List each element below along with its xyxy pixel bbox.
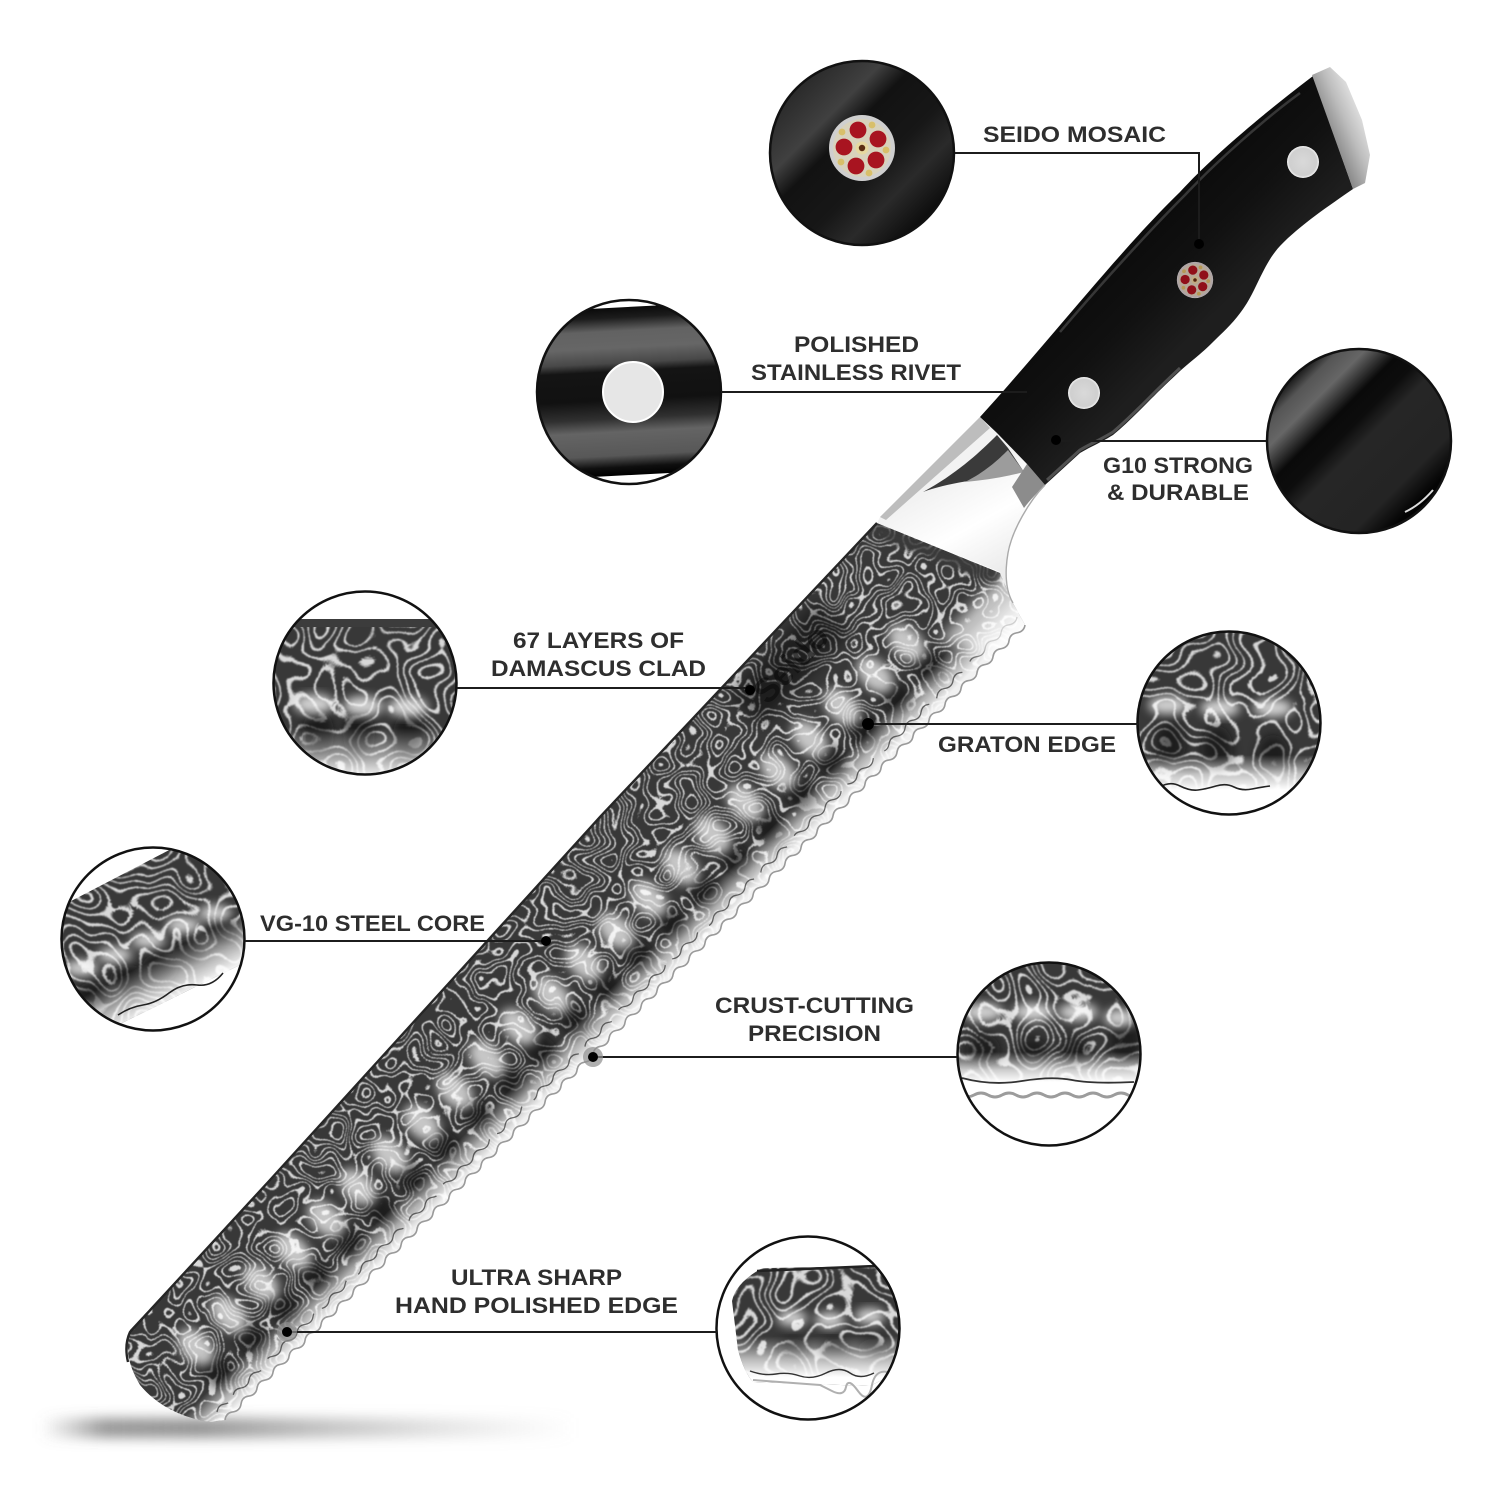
rivet: top bbox=[1287, 146, 1319, 178]
detail circle: rivet bbox=[536, 298, 722, 486]
callout: polished stainless rivet bbox=[496, 299, 1027, 485]
label: HAND POLISHED EDGE bbox=[395, 1293, 678, 1318]
butt cap bbox=[1312, 67, 1370, 189]
detail circle: hollows bbox=[1135, 628, 1325, 825]
leader line bbox=[245, 940, 546, 942]
label: GRATON EDGE bbox=[938, 732, 1116, 757]
logo shadow band bbox=[729, 600, 851, 726]
blade spine bbox=[126, 523, 877, 1362]
label: STAINLESS RIVET bbox=[751, 360, 962, 385]
leader dot bbox=[1194, 239, 1204, 249]
ground shadow bbox=[40, 1418, 575, 1438]
callout: VG-10 steel core bbox=[50, 845, 551, 1035]
handle bbox=[980, 67, 1370, 485]
detail circle: damascus bbox=[270, 592, 460, 784]
label bbox=[751, 332, 962, 385]
granton hollows: highlights bbox=[171, 618, 932, 1372]
serrated edge outline bbox=[225, 625, 1025, 1420]
callout: Seido mosaic bbox=[765, 55, 1204, 250]
detail circle: mosaic bbox=[765, 55, 960, 250]
label bbox=[395, 1265, 678, 1318]
knife illustration bbox=[115, 67, 1370, 1435]
leader line bbox=[955, 153, 1199, 244]
label bbox=[491, 628, 706, 681]
label: PRECISION bbox=[748, 1021, 881, 1046]
blade bbox=[115, 510, 1040, 1435]
detail circle: G10 grain bbox=[1262, 345, 1457, 540]
label: 67 LAYERS OF bbox=[513, 628, 684, 653]
detail circle: serrations bbox=[955, 960, 1145, 1148]
leader dot bbox=[541, 936, 551, 946]
label bbox=[715, 993, 914, 1046]
label: VG-10 STEEL CORE bbox=[260, 911, 485, 936]
etched logo: Seido bbox=[746, 618, 837, 711]
label: SEIDO MOSAIC bbox=[983, 122, 1166, 147]
label: POLISHED bbox=[794, 332, 919, 357]
label: & DURABLE bbox=[1107, 480, 1249, 505]
callout: G10 bbox=[1051, 345, 1457, 540]
leader dot bbox=[583, 1047, 603, 1067]
leader line bbox=[593, 1056, 957, 1058]
label: ULTRA SHARP bbox=[451, 1265, 622, 1290]
leader line bbox=[457, 687, 750, 689]
callout: Graton edge bbox=[862, 628, 1325, 825]
label bbox=[1103, 453, 1253, 505]
label: DAMASCUS CLAD bbox=[491, 656, 706, 681]
mosaic pin bbox=[1177, 262, 1213, 298]
leader dot bbox=[1051, 435, 1061, 445]
callout: ultra sharp hand polished edge bbox=[277, 1236, 910, 1420]
bevelled cutting edge bbox=[186, 597, 1025, 1422]
inner wavy temper line bbox=[217, 617, 1017, 1412]
detail circle: polished edge bbox=[716, 1236, 910, 1420]
callout: crust-cutting precision bbox=[583, 960, 1145, 1148]
leader line bbox=[868, 723, 1138, 725]
detail circle: steel core bbox=[60, 846, 246, 1032]
heel highlight bbox=[935, 572, 1025, 660]
bolster bbox=[877, 417, 1045, 603]
label: CRUST-CUTTING bbox=[715, 993, 914, 1018]
label: G10 STRONG bbox=[1103, 453, 1253, 478]
plunge line shadow bbox=[870, 523, 1000, 584]
rivet: bottom bbox=[1068, 377, 1100, 409]
leader line bbox=[1056, 440, 1266, 442]
leader dot bbox=[277, 1322, 297, 1342]
leader line bbox=[721, 391, 1027, 393]
granton hollows: dark bbox=[194, 642, 955, 1396]
leader dot bbox=[745, 685, 755, 695]
leader line bbox=[287, 1331, 717, 1333]
damascus texture bbox=[115, 510, 1040, 1435]
callout: 67 layers bbox=[270, 592, 755, 784]
leader dot bbox=[862, 718, 874, 730]
